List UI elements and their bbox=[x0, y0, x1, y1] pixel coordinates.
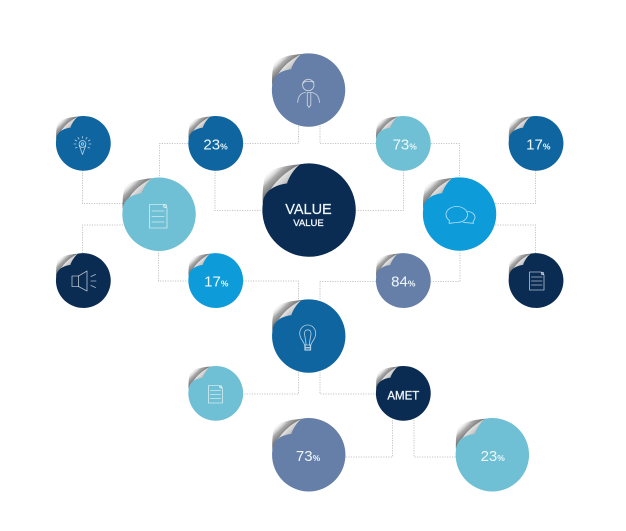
icon: person with tie bbox=[298, 79, 320, 108]
label: 23%: 23% bbox=[481, 448, 505, 465]
node: chat bbox=[423, 177, 496, 251]
node: 23 percent bottom bbox=[456, 418, 529, 491]
icon: document bbox=[208, 386, 222, 403]
node: manager bbox=[272, 53, 345, 127]
node: 73 percent top bbox=[376, 116, 431, 171]
icon: speech bubbles bbox=[446, 206, 475, 223]
icon: idea rays bbox=[74, 136, 91, 154]
node: speaker bbox=[56, 253, 111, 308]
node: 84 percent bbox=[376, 253, 431, 308]
label: value: VALUE bbox=[285, 202, 332, 218]
node: amet bbox=[376, 366, 431, 421]
label: 73%: 73% bbox=[393, 136, 417, 153]
dotted connectors bbox=[82, 126, 536, 457]
node: 17 percent top right bbox=[509, 116, 563, 171]
label: value small: VALUE bbox=[293, 218, 324, 229]
icon: document bbox=[530, 272, 544, 290]
node: 23 percent bbox=[188, 116, 243, 171]
node: 73 percent bottom bbox=[272, 418, 345, 491]
label: 17%: 17% bbox=[526, 136, 551, 153]
icon: light bulb bbox=[300, 325, 316, 350]
node: small bulb bbox=[56, 116, 111, 171]
label: 23%: 23% bbox=[203, 136, 228, 153]
label: 84%: 84% bbox=[391, 274, 416, 291]
node: big bulb bbox=[272, 299, 345, 373]
label: 73%: 73% bbox=[296, 448, 321, 465]
node: central value bbox=[262, 163, 356, 257]
node: document dark bbox=[509, 253, 563, 308]
label: amet: AMET bbox=[387, 390, 419, 402]
node: document light bbox=[188, 366, 243, 421]
node: 17 percent bright bbox=[188, 253, 243, 308]
icon: speaker bbox=[72, 271, 96, 291]
label: 17%: 17% bbox=[204, 274, 229, 291]
node: document medium bbox=[122, 178, 196, 251]
icon: document bbox=[150, 204, 167, 228]
